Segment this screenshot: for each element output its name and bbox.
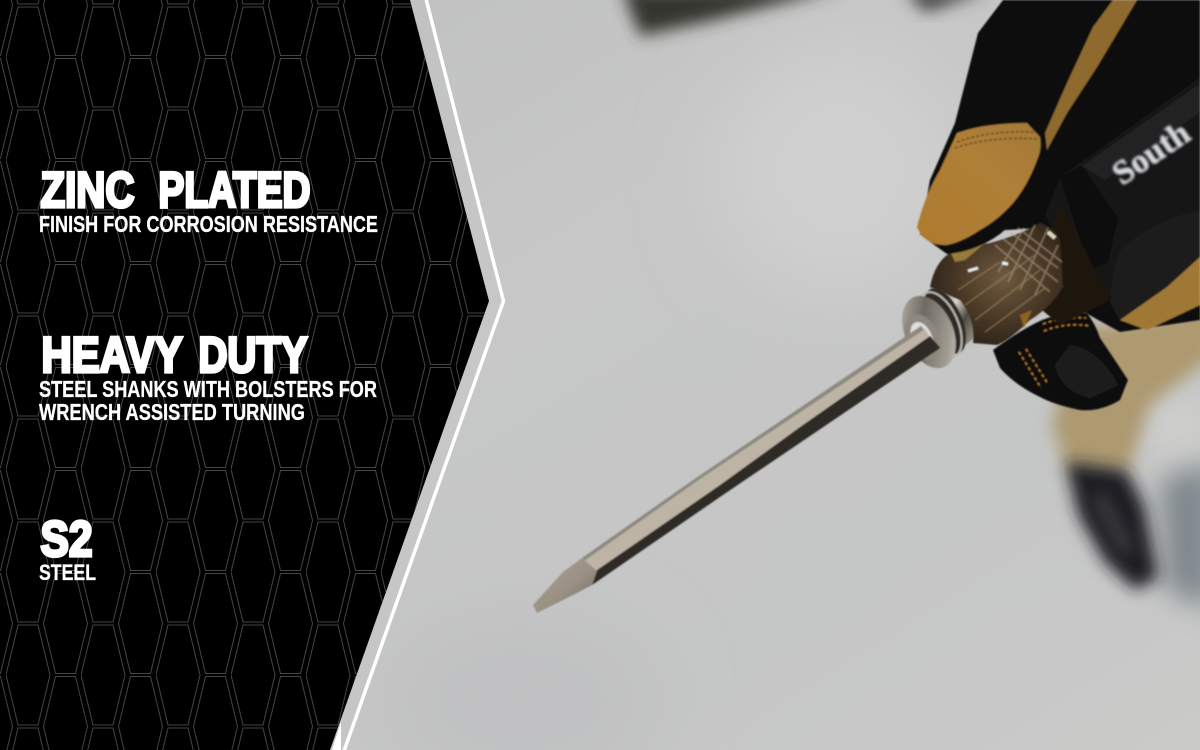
heading: S2 xyxy=(40,511,92,567)
white chevron line xyxy=(344,0,504,750)
neck rings xyxy=(935,287,978,348)
feature: s2 steel xyxy=(39,511,96,585)
description: FINISH FOR CORROSION RESISTANCE xyxy=(39,211,378,237)
heading xyxy=(42,327,308,383)
blurred leg and boot in background xyxy=(1052,305,1200,610)
handle brand lettering: South xyxy=(1106,114,1197,193)
black tool handle xyxy=(1045,77,1200,300)
tan fingertip xyxy=(917,123,1041,245)
lower glove finger xyxy=(993,312,1128,410)
screwdriver bolster xyxy=(892,282,978,376)
top facet xyxy=(582,326,925,564)
tan glove stripe xyxy=(1045,0,1137,150)
screwdriver shank xyxy=(533,326,940,613)
heading: HEAVY xyxy=(42,327,182,383)
dark facet xyxy=(592,336,940,585)
black glove back xyxy=(920,0,1200,332)
heading: DUTY xyxy=(198,327,308,383)
description xyxy=(39,376,377,425)
description: WRENCH ASSISTED TURNING xyxy=(39,399,305,425)
heading xyxy=(40,162,310,218)
disc flange xyxy=(892,288,966,376)
white corner wedge xyxy=(332,722,341,750)
feature: heavy duty xyxy=(39,327,377,425)
description: STEEL xyxy=(39,560,96,585)
description: STEEL SHANKS WITH BOLSTERS FOR xyxy=(39,376,377,402)
tapered tip xyxy=(533,558,597,613)
feature: zinc plated xyxy=(39,162,378,237)
side panel: black hex pattern with chevron edge xyxy=(0,0,489,750)
glove and tool handle xyxy=(917,0,1200,345)
heading: PLATED xyxy=(158,162,310,218)
tan palm patch xyxy=(1120,257,1200,330)
disc face xyxy=(898,309,946,365)
amber clear handle collar xyxy=(930,200,1110,345)
fingertip black edge xyxy=(922,137,1047,254)
right palm finger xyxy=(1110,210,1200,320)
light facet xyxy=(584,329,930,571)
heading: ZINC xyxy=(40,162,134,218)
